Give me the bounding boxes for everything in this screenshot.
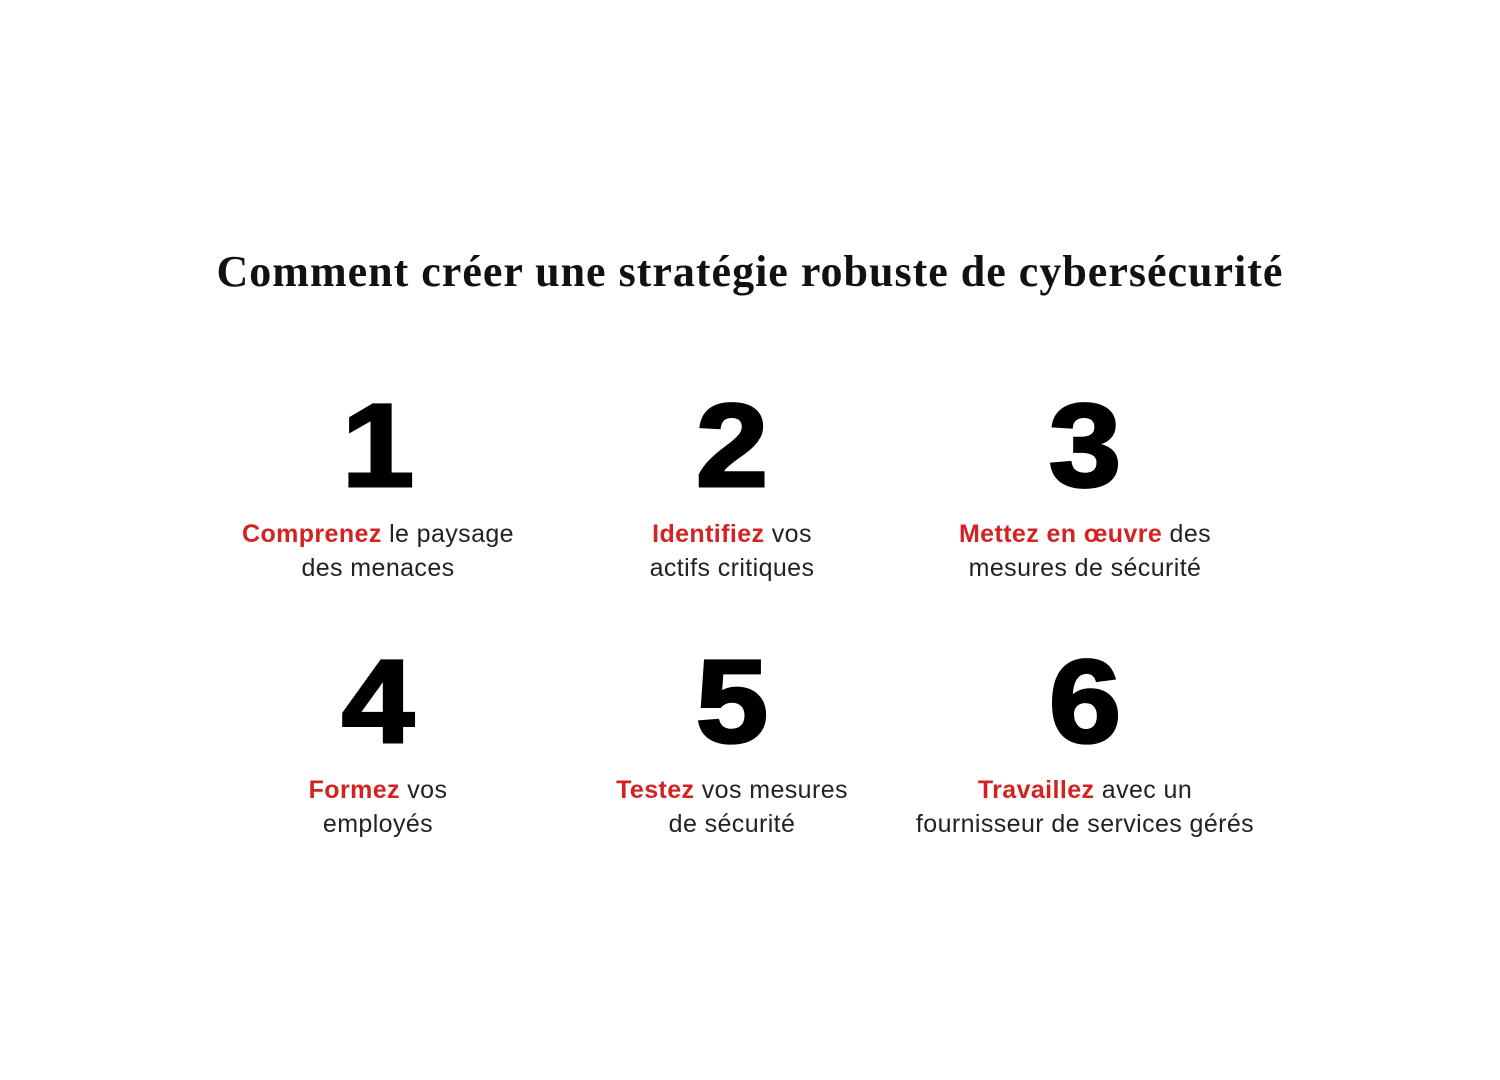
text 2: Identifiez vos — [652, 520, 812, 548]
number 5: 5 — [696, 636, 768, 768]
number 1: 1 — [342, 380, 414, 512]
text 3 — [959, 520, 1211, 582]
text 3: Mettez en œuvre des — [959, 520, 1211, 548]
number 6: 6 — [1049, 636, 1121, 768]
text 1: Comprenez le paysage — [242, 520, 514, 548]
text 1: des menaces — [301, 554, 455, 582]
step 5 — [616, 636, 848, 838]
title: Comment créer une stratégie robuste de cybersécurité — [217, 247, 1283, 296]
text 6: Travaillez avec un — [978, 776, 1192, 804]
number 3: 3 — [1049, 380, 1121, 512]
text 3: mesures de sécurité — [969, 554, 1201, 582]
text 4: Formez vos — [309, 776, 447, 804]
text 2 — [650, 520, 814, 582]
text 2: actifs critiques — [650, 554, 814, 582]
number 4: 4 — [342, 636, 414, 768]
text 6 — [916, 776, 1254, 838]
text 6: fournisseur de services gérés — [916, 810, 1254, 838]
step 1 — [242, 380, 514, 582]
text 5 — [616, 776, 848, 838]
text 4 — [309, 776, 447, 838]
step 6 — [916, 636, 1254, 838]
text 1 — [242, 520, 514, 582]
step 4 — [309, 636, 447, 838]
text 4: employés — [323, 810, 433, 838]
step 3 — [959, 380, 1211, 582]
number 2: 2 — [696, 380, 768, 512]
step 2 — [650, 380, 814, 582]
text 5: Testez vos mesures — [616, 776, 848, 804]
text 5: de sécurité — [669, 810, 795, 838]
